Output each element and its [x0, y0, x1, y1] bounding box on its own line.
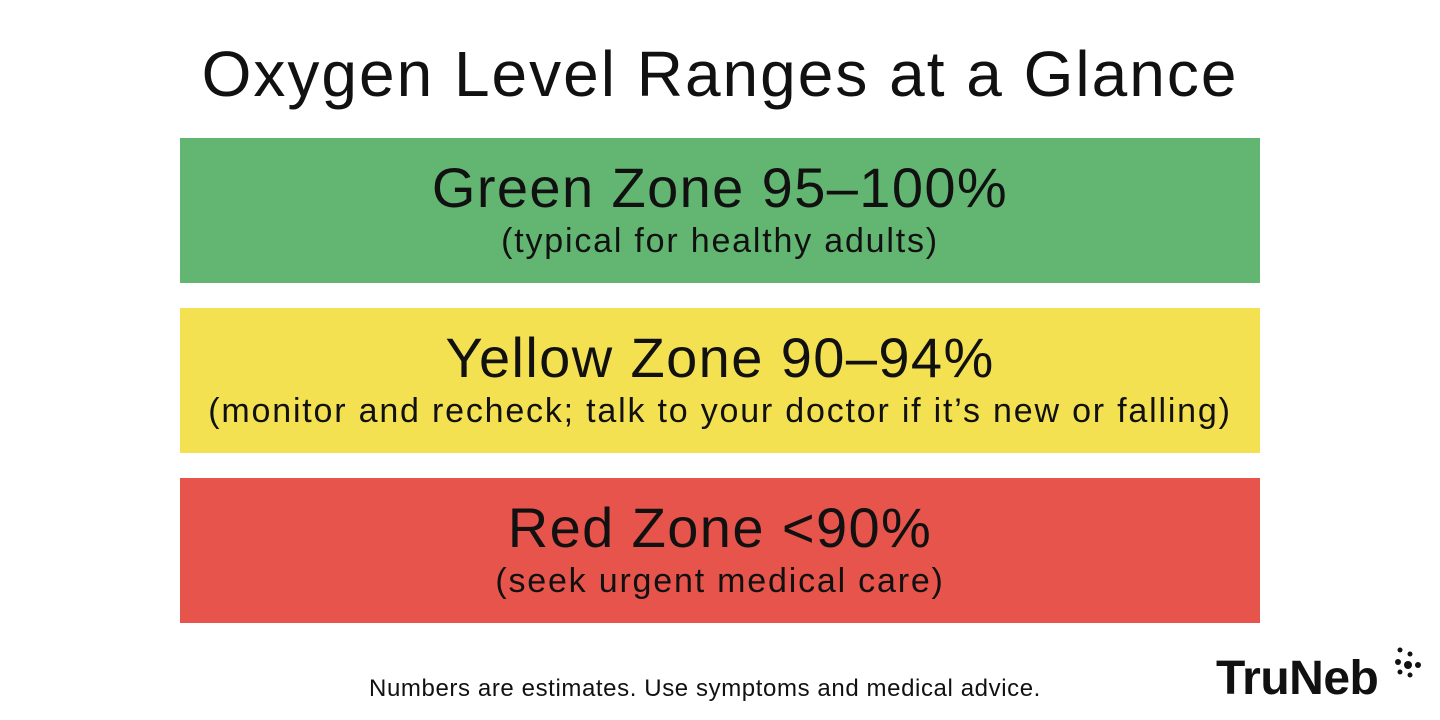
heading: red zone: Red Zone <90%	[508, 496, 932, 559]
icon: dots	[1395, 648, 1421, 678]
text: yellow note: (monitor and recheck; talk to your doctor if it’s new or falling)	[208, 392, 1232, 430]
footnote: Numbers are estimates. Use symptoms and medical advice.	[369, 675, 1041, 702]
text: red note: (seek urgent medical care)	[495, 562, 945, 600]
panel: yellow zone	[180, 308, 1260, 453]
title: Oxygen Level Ranges at a Glance	[202, 38, 1238, 110]
logo: TruNeb	[1216, 652, 1378, 705]
heading: green zone: Green Zone 95–100%	[432, 156, 1008, 219]
heading: yellow zone: Yellow Zone 90–94%	[445, 326, 995, 389]
panel: red zone	[180, 478, 1260, 623]
text: green note: (typical for healthy adults)	[501, 222, 939, 260]
panel: green zone	[180, 138, 1260, 283]
